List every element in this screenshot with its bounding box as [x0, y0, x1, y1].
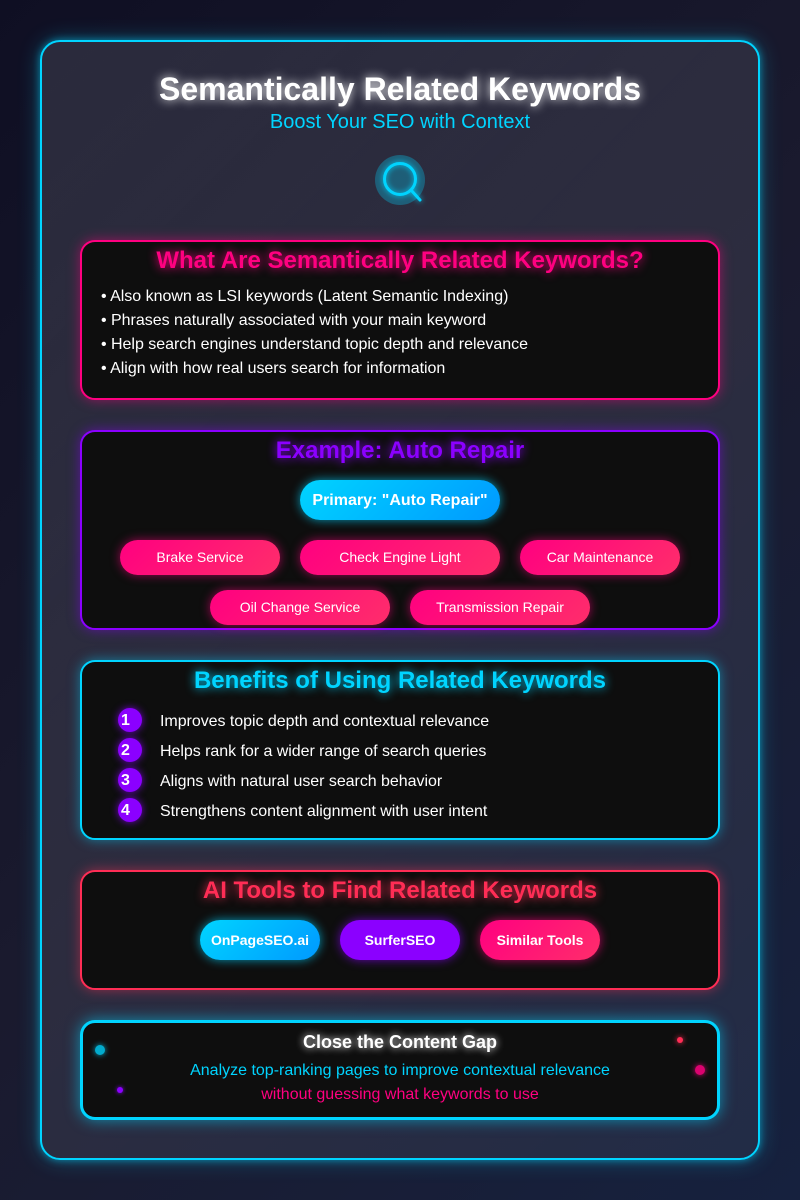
- keyword pill: [210, 590, 390, 625]
- bullet list: [101, 288, 528, 377]
- heading: Close the Content Gap: [303, 1032, 497, 1052]
- primary keyword pill: Primary: "Auto Repair": [312, 492, 488, 509]
- keyword pill: Brake Service: [156, 549, 244, 565]
- keyword pill: Oil Change Service: [240, 599, 360, 615]
- tool: similar tools: [480, 920, 600, 960]
- tool: onpageseo.ai: OnPageSEO.ai: [211, 932, 309, 948]
- panel: what are semantically related keywords: [80, 240, 720, 400]
- heading: Example: Auto Repair: [276, 437, 524, 464]
- particle: [695, 1065, 705, 1075]
- keyword pill: Car Maintenance: [547, 549, 653, 565]
- benefit 4 number: [118, 798, 142, 822]
- benefit 1 number: [118, 708, 142, 732]
- subtitle: Boost Your SEO with Context: [270, 111, 530, 133]
- icon: magnifying glass: [375, 155, 425, 205]
- title: Semantically Related Keywords: [159, 71, 641, 107]
- panel: close the content gap: [80, 1020, 720, 1120]
- panel: ai tools: [80, 870, 720, 990]
- keyword pill: [410, 590, 590, 625]
- benefit 2 text: Helps rank for a wider range of search queries: [160, 743, 486, 760]
- benefit 1 number: 1: [121, 712, 130, 729]
- pink text line: without guessing what keywords to use: [261, 1086, 539, 1103]
- benefit 2 number: 2: [121, 742, 130, 759]
- benefit 3 number: 3: [121, 772, 130, 789]
- panel: example auto repair: [80, 430, 720, 630]
- particle: [95, 1045, 105, 1055]
- keyword pill: Check Engine Light: [339, 549, 461, 565]
- keyword pill: Transmission Repair: [436, 599, 564, 615]
- particle: [117, 1087, 123, 1093]
- keyword pill: [120, 540, 280, 575]
- bullet list: • Align with how real users search for information: [101, 360, 445, 377]
- heading: Benefits of Using Related Keywords: [194, 667, 606, 694]
- benefit 4 number: 4: [121, 802, 130, 819]
- tool: surferseo: SurferSEO: [365, 932, 435, 948]
- particle: [677, 1037, 683, 1043]
- bullet list: • Also known as LSI keywords (Latent Semantic Indexing): [101, 288, 508, 305]
- tool: onpageseo.ai: [200, 920, 320, 960]
- benefit 1 text: Improves topic depth and contextual relevance: [160, 713, 489, 730]
- panel: benefits: [80, 660, 720, 840]
- bullet list: • Help search engines understand topic depth and relevance: [101, 336, 528, 353]
- benefit 3 number: [118, 768, 142, 792]
- keyword pill: [300, 540, 500, 575]
- tool: surferseo: [340, 920, 460, 960]
- heading: What Are Semantically Related Keywords?: [156, 247, 644, 274]
- bullet list: • Phrases naturally associated with your main keyword: [101, 312, 486, 329]
- cyan text line: Analyze top-ranking pages to improve contextual relevance: [190, 1062, 610, 1079]
- benefit 2 number: [118, 738, 142, 762]
- primary keyword pill: [300, 480, 500, 520]
- benefit 3 text: Aligns with natural user search behavior: [160, 773, 442, 790]
- benefit 4 text: Strengthens content alignment with user intent: [160, 803, 487, 820]
- heading: AI Tools to Find Related Keywords: [203, 877, 597, 904]
- tool: similar tools: Similar Tools: [497, 932, 583, 948]
- keyword pill: [520, 540, 680, 575]
